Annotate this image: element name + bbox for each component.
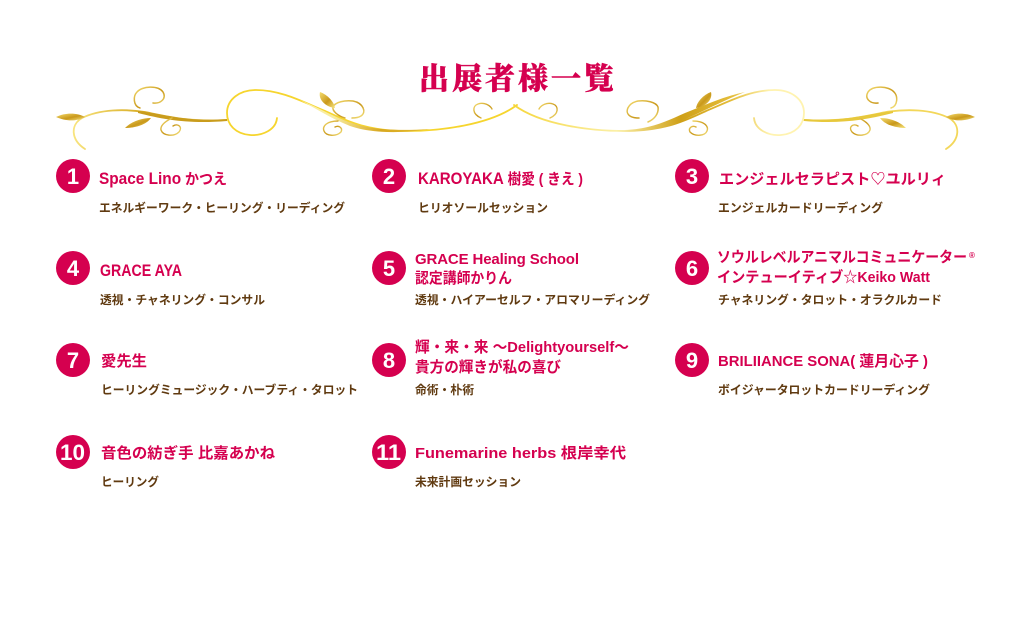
exhibitor 9 bbox=[675, 343, 930, 397]
exhibitor 1: 1 bbox=[67, 164, 79, 189]
exhibitor 8 bbox=[372, 339, 629, 397]
exhibitor 1 bbox=[56, 159, 345, 215]
exhibitor 9: BRILIIANCE SONA( 蓮月心子 ) bbox=[718, 353, 928, 370]
exhibitor 4: 透視・チャネリング・コンサル bbox=[100, 292, 265, 307]
exhibitor 6: ソウルレベルアニマルコミュニケーター bbox=[717, 249, 967, 266]
exhibitor 7: 7 bbox=[67, 348, 79, 373]
exhibitor 11 bbox=[372, 435, 626, 489]
exhibitor 3: 3 bbox=[686, 164, 698, 189]
exhibitor 6: インテューイティブ☆Keiko Watt bbox=[717, 268, 930, 286]
exhibitor 4: GRACE AYA bbox=[100, 262, 182, 280]
exhibitor 6 bbox=[675, 249, 975, 307]
exhibitor 8: 貴方の輝きが私の喜び bbox=[415, 358, 561, 376]
exhibitor 7 bbox=[56, 343, 358, 397]
exhibitor 3 bbox=[675, 159, 946, 215]
exhibitor 10: 音色の紡ぎ手 比嘉あかね bbox=[101, 444, 275, 462]
exhibitor 2: KAROYAKA 樹愛 ( きえ ) bbox=[418, 170, 583, 188]
exhibitor 10: ヒーリング bbox=[101, 474, 159, 489]
exhibitor 2: ヒリオソールセッション bbox=[418, 201, 548, 215]
exhibitor 5: 5 bbox=[383, 256, 395, 281]
exhibitor 7: 愛先生 bbox=[101, 353, 147, 370]
exhibitor 11: 未来計画セッション bbox=[415, 474, 521, 489]
exhibitor 8: 8 bbox=[383, 348, 395, 373]
title: 出展者様一覧 bbox=[419, 62, 614, 96]
exhibitor 5: GRACE Healing School bbox=[415, 251, 579, 268]
exhibitor 4 bbox=[56, 251, 265, 307]
exhibitor 2 bbox=[372, 159, 583, 215]
exhibitor 9: 9 bbox=[686, 348, 698, 373]
exhibitor 6: チャネリング・タロット・オラクルカード bbox=[718, 292, 942, 307]
exhibitor 8: 輝・来・来 ～Delightyourself～ bbox=[415, 339, 629, 356]
leaves bbox=[56, 114, 85, 120]
exhibitor 1: エネルギーワーク・ヒーリング・リーディング bbox=[99, 200, 345, 215]
exhibitor 6: ® bbox=[969, 251, 975, 260]
exhibitor 5: 認定講師かりん bbox=[415, 269, 512, 287]
exhibitor 3: エンジェルセラピスト♡ユルリィ bbox=[719, 171, 946, 188]
exhibitor 11: Funemarine herbs 根岸幸代 bbox=[415, 444, 626, 462]
leaves bbox=[946, 114, 975, 120]
exhibitor 10 bbox=[56, 435, 275, 489]
gold flourish ornament bbox=[56, 87, 975, 149]
exhibitor 5: 透視・ハイアーセルフ・アロマリーディング bbox=[415, 292, 650, 307]
left flourish bbox=[56, 87, 517, 149]
exhibitor 10: 10 bbox=[60, 440, 85, 465]
right flourish bbox=[514, 87, 975, 149]
exhibitor 8: 命術・朴術 bbox=[415, 382, 474, 397]
exhibitor 5 bbox=[372, 251, 650, 307]
exhibitor 2: 2 bbox=[383, 164, 395, 189]
exhibitor 11: 11 bbox=[376, 440, 401, 465]
exhibitor 4: 4 bbox=[67, 256, 80, 281]
exhibitor 7: ヒーリングミュージック・ハーブティ・タロット bbox=[101, 382, 358, 397]
exhibitor 9: ボイジャータロットカードリーディング bbox=[718, 382, 930, 397]
exhibitor 6: 6 bbox=[686, 256, 698, 281]
exhibitor 3: エンジェルカードリーディング bbox=[718, 200, 883, 215]
exhibitor 1: Space Lino かつえ bbox=[99, 170, 227, 188]
